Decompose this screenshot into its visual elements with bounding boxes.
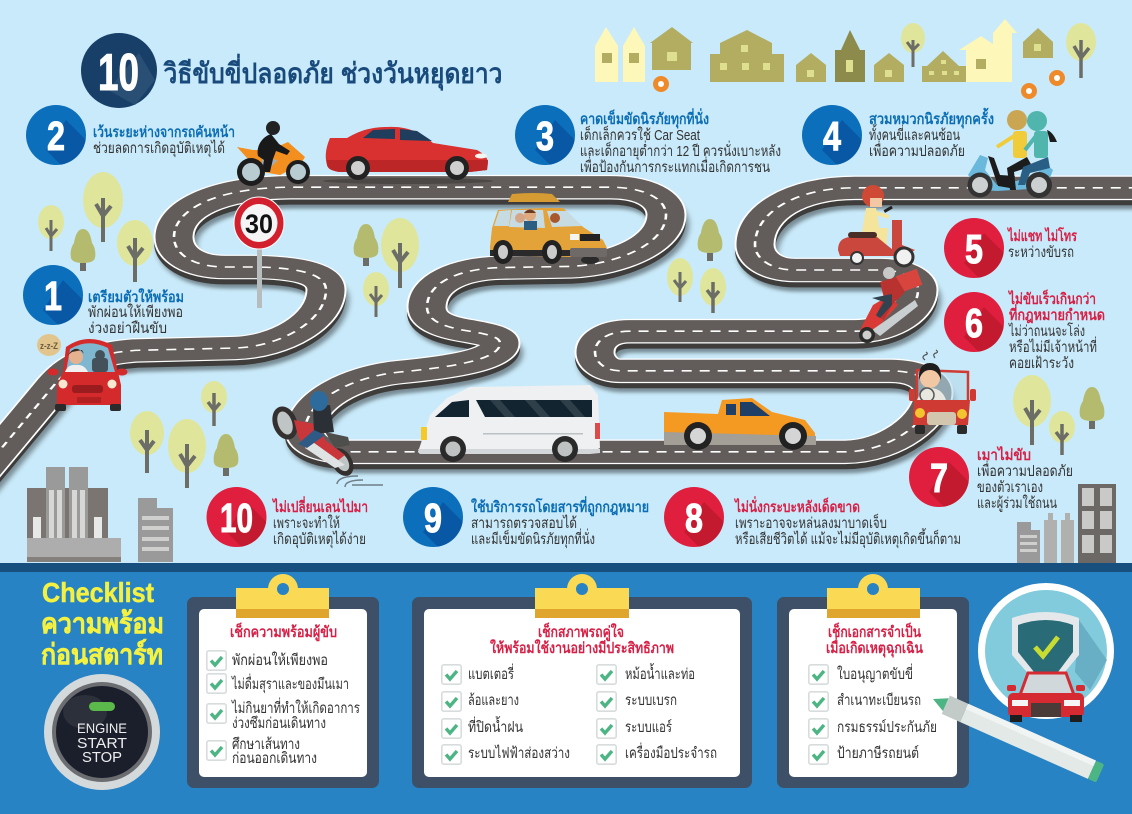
badge 7: 7 [930, 455, 948, 501]
clipboard: driver readiness: ไม่ดื่มสุราและของมึนเมา [231, 673, 349, 694]
clipboard: driver readiness: ศึกษาเส้นทาง [232, 736, 300, 753]
badge 1: 1 [44, 273, 62, 319]
step 2: เว้นระยะห่างจากรถคันหน้า [93, 124, 235, 141]
speed limit sign 30 [234, 197, 284, 308]
couple on blue scooter [968, 110, 1057, 198]
step 3 [515, 105, 781, 190]
clipboard: vehicle condition: ล้อและยาง [468, 692, 519, 709]
clip [535, 574, 629, 618]
step 4 [802, 105, 994, 190]
step 3: คาดเข็มขัดนิรภัยทุกที่นั่ง [580, 108, 709, 129]
delivery rider on red bike [859, 267, 922, 343]
buildings bottom left [27, 467, 173, 562]
step 8: เพราะอาจจะหล่นลงมาบาดเจ็บ [735, 513, 887, 532]
clipboard: vehicle condition: ระบบเบรก [625, 692, 677, 709]
step 8: ไม่นั่งกระบะหลังเด็ดขาด [733, 496, 860, 516]
clipboard: documents: ป้ายภาษีรถยนต์ [837, 745, 919, 762]
step 10: ไม่เปลี่ยนเลนไปมา [271, 496, 368, 516]
step 6: ไม่ขับเร็วเกินกว่า [1007, 289, 1096, 308]
step 4: ทั้งคนขี่และคนซ้อน [869, 124, 960, 144]
badge 8 [664, 487, 744, 572]
road [0, 187, 1132, 496]
clipboard: documents: กรมธรรม์ประกันภัย [837, 719, 937, 736]
badge 9 [403, 487, 483, 572]
engine start stop button [44, 674, 160, 790]
sky background [0, 0, 1132, 565]
badge 2: 2 [47, 113, 65, 159]
red car front [1007, 673, 1085, 722]
step 9: และมีเข็มขัดนิรภัยทุกที่นั่ง [471, 528, 595, 549]
step 1 [23, 265, 184, 350]
buildings bottom right [1017, 484, 1116, 564]
step 7: และผู้ร่วมใช้ถนน [977, 494, 1057, 512]
clipboard: driver readiness: พักผ่อนให้เพียงพอ [232, 651, 328, 669]
badge 8: 8 [685, 495, 703, 541]
yellow SUV with family [490, 193, 607, 264]
clipboard: vehicle condition [412, 574, 752, 788]
clip [827, 574, 920, 618]
clipboard: driver readiness: ไม่กินยาที่ทำให้เกิดอาการ [231, 697, 360, 717]
badge 10: 10 [220, 495, 253, 541]
girl on red vespa [838, 185, 915, 266]
step 6: ที่กฎหมายกำหนด [1009, 304, 1105, 324]
shield [1012, 612, 1079, 678]
checklist band background [0, 563, 1132, 814]
clipboard: vehicle condition: ให้พร้อมใช้งานอย่างมีประสิทธิภาพ [490, 639, 674, 657]
clipboard: driver readiness: เช็กความพร้อมผู้ขับ [230, 622, 337, 642]
title badge 10 [81, 33, 157, 108]
title: วิธีขับขี่ปลอดภัย ช่วงวันหยุดยาว [162, 53, 502, 91]
clipboard: vehicle condition: แบตเตอรี่ [468, 663, 514, 683]
houses skyline [595, 19, 1096, 82]
step 7 [909, 445, 1073, 532]
step 7: เพื่อความปลอดภัย [977, 460, 1073, 480]
step 6: คอยเฝ้าระวัง [1009, 355, 1074, 372]
title [81, 33, 502, 108]
step 8: หรือเสียชีวิตได้ แม้จะไม่มีอุบัติเหตุเกิดขึ้นก็ตาม [735, 528, 961, 549]
clipboard: documents: เช็กเอกสารจำเป็น [828, 622, 922, 641]
step 4: เพื่อความปลอดภัย [869, 140, 965, 160]
badge 3 [515, 105, 595, 190]
clipboard: documents: ใบอนุญาตขับขี่ [837, 663, 913, 684]
badge 3: 3 [536, 113, 554, 159]
step 4: สวมหมวกนิรภัยทุกครั้ง [869, 107, 994, 129]
clipboard: driver readiness [187, 574, 379, 788]
badge 1 [23, 265, 103, 350]
sleepy driver red car: z-z-Z [40, 341, 58, 351]
step 6 [944, 289, 1105, 377]
step 7: เมาไม่ขับ [977, 445, 1031, 464]
white van [418, 385, 600, 462]
clipboard: driver readiness: ง่วงซึมก่อนเดินทาง [232, 715, 326, 732]
step 9: ใช้บริการรถโดยสารที่ถูกกฎหมาย [471, 496, 649, 517]
flowers [653, 70, 1065, 99]
checklist heading [41, 577, 164, 670]
speed limit sign 30: 30 [245, 209, 273, 239]
step 10: เพราะจะทำให้ [273, 514, 340, 532]
step 5: ไม่แชท ไม่โทร [1007, 226, 1078, 245]
checklist heading: ก่อนสตาร์ท [41, 639, 163, 670]
sleepy driver red car [37, 334, 128, 411]
step 6: หรือไม่มีเจ้าหน้าที่ [1009, 336, 1097, 356]
badge 9: 9 [424, 495, 442, 541]
step 7: ของตัวเราเอง [977, 479, 1043, 496]
step 9 [403, 487, 649, 572]
title badge 10: 10 [98, 44, 139, 102]
badge 5: 5 [965, 226, 983, 272]
clipboard: vehicle condition: ระบบแอร์ [625, 719, 672, 736]
step 5 [944, 218, 1078, 303]
clipboard: vehicle condition: เช็กสภาพรถคู่ใจ [538, 622, 624, 642]
clipboard: driver readiness: ก่อนออกเดินทาง [232, 750, 317, 767]
step 10: เกิดอุบัติเหตุได้ง่าย [273, 530, 366, 549]
clipboard: documents [777, 574, 969, 788]
step 8 [664, 487, 961, 572]
clipboard: vehicle condition: ที่ปิดน้ำฝน [468, 716, 523, 736]
engine start stop button: STOP [82, 749, 122, 766]
badge 7 [909, 447, 989, 532]
engine start stop button: START [77, 735, 127, 752]
motorbike rider step 2 [237, 121, 310, 186]
step 6: ไม่ว่าถนนจะโล่ง [1008, 322, 1085, 340]
clipboard: vehicle condition: หม้อน้ำและท่อ [625, 663, 695, 683]
badge 6 [944, 292, 1024, 377]
orange pickup [664, 398, 816, 450]
step 1: พักผ่อนให้เพียงพอ [88, 303, 183, 321]
clipboard: documents: เมื่อเกิดเหตุฉุกเฉิน [826, 637, 924, 658]
clipboard: vehicle condition: ระบบไฟฟ้าส่องสว่าง [468, 744, 570, 762]
stressed driver red car [909, 350, 976, 434]
badge 6: 6 [965, 300, 983, 346]
step 1: เตรียมตัวให้พร้อม [88, 288, 184, 306]
highlighter pen [929, 690, 1104, 783]
clipboard: vehicle condition: เครื่องมือประจำรถ [625, 742, 717, 762]
engine start stop button: ENGINE [77, 720, 127, 736]
step 1: ง่วงอย่าฝืนขับ [88, 320, 167, 337]
leaning motorbike step 10 [268, 391, 383, 487]
clipboard: documents: สำเนาทะเบียนรถ [837, 692, 921, 709]
step 2: ช่วยลดการเกิดอุบัติเหตุได้ [93, 139, 225, 158]
shield and car emblem [978, 583, 1114, 722]
step 3: เพื่อป้องกันการกระแทกเมื่อเกิดการชน [580, 156, 770, 176]
clip [236, 574, 329, 618]
badge 4: 4 [823, 113, 841, 159]
badge 10 [206, 487, 286, 572]
step 5: ระหว่างขับรถ [1008, 244, 1074, 261]
step 10 [206, 487, 368, 572]
badge 2 [26, 105, 106, 190]
step 9: สามารถตรวจสอบได้ [471, 514, 577, 532]
badge 4 [802, 105, 882, 190]
step 2 [26, 105, 235, 190]
trees [38, 172, 1104, 488]
checklist heading: Checklist [42, 577, 154, 608]
checklist heading: ความพร้อม [41, 608, 164, 639]
step 3: และเด็กอายุต่ำกว่า 12 ปี ควรนั่งเบาะหลัง [580, 140, 781, 161]
red sedan [323, 127, 493, 184]
step 3: เด็กเล็กควรใช้ Car Seat [580, 125, 701, 144]
